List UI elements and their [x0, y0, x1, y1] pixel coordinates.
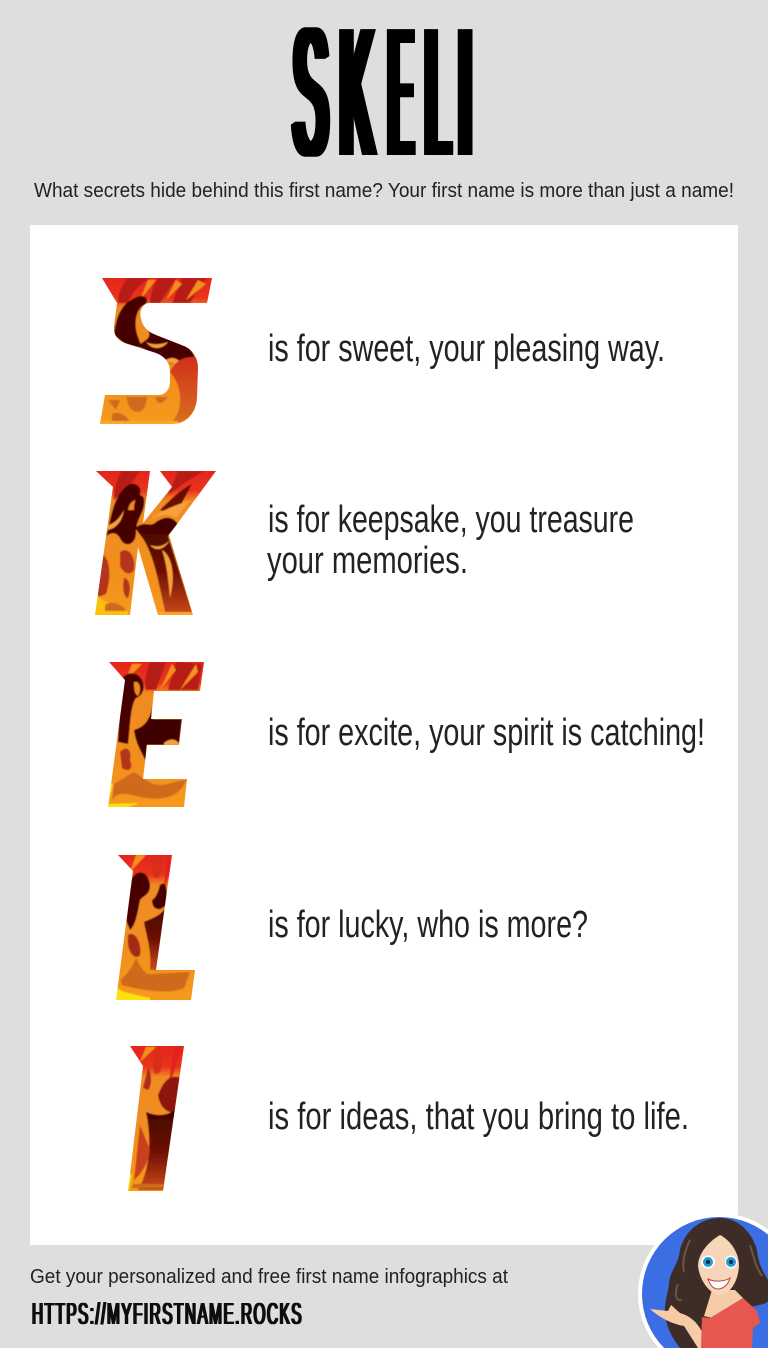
panel: name letters [30, 225, 738, 1245]
avatar shirt [701, 1298, 760, 1348]
icon: avatar [638, 1213, 768, 1348]
icon: flame letter E [104, 660, 207, 810]
footer text: Get your personalized and free first name infographics at [30, 1266, 508, 1288]
avatar hair highlights [676, 1240, 762, 1300]
text: K line [267, 499, 634, 582]
icon: flame letter L [116, 855, 195, 1000]
avatar face [698, 1235, 739, 1295]
icon: flame letter I [128, 1046, 184, 1191]
avatar hand and arm [650, 1305, 708, 1348]
icon: flame letter K [95, 471, 216, 615]
text: L line: is for lucky, who is more? [268, 904, 588, 946]
subtitle: What secrets hide behind this first name? Your first name is more than just a name! [34, 180, 734, 202]
text: K line: is for keepsake, you treasure [268, 499, 634, 541]
icon: flame letter S [100, 278, 212, 424]
avatar smile [708, 1278, 730, 1289]
avatar hair [665, 1218, 768, 1348]
text: HTTPS://MYFIRSTNAME.ROCKS [32, 1296, 303, 1331]
avatar neck [704, 1290, 743, 1318]
title [294, 0, 472, 195]
text: K line: your memories. [267, 540, 468, 582]
avatar eyes [701, 1256, 737, 1268]
